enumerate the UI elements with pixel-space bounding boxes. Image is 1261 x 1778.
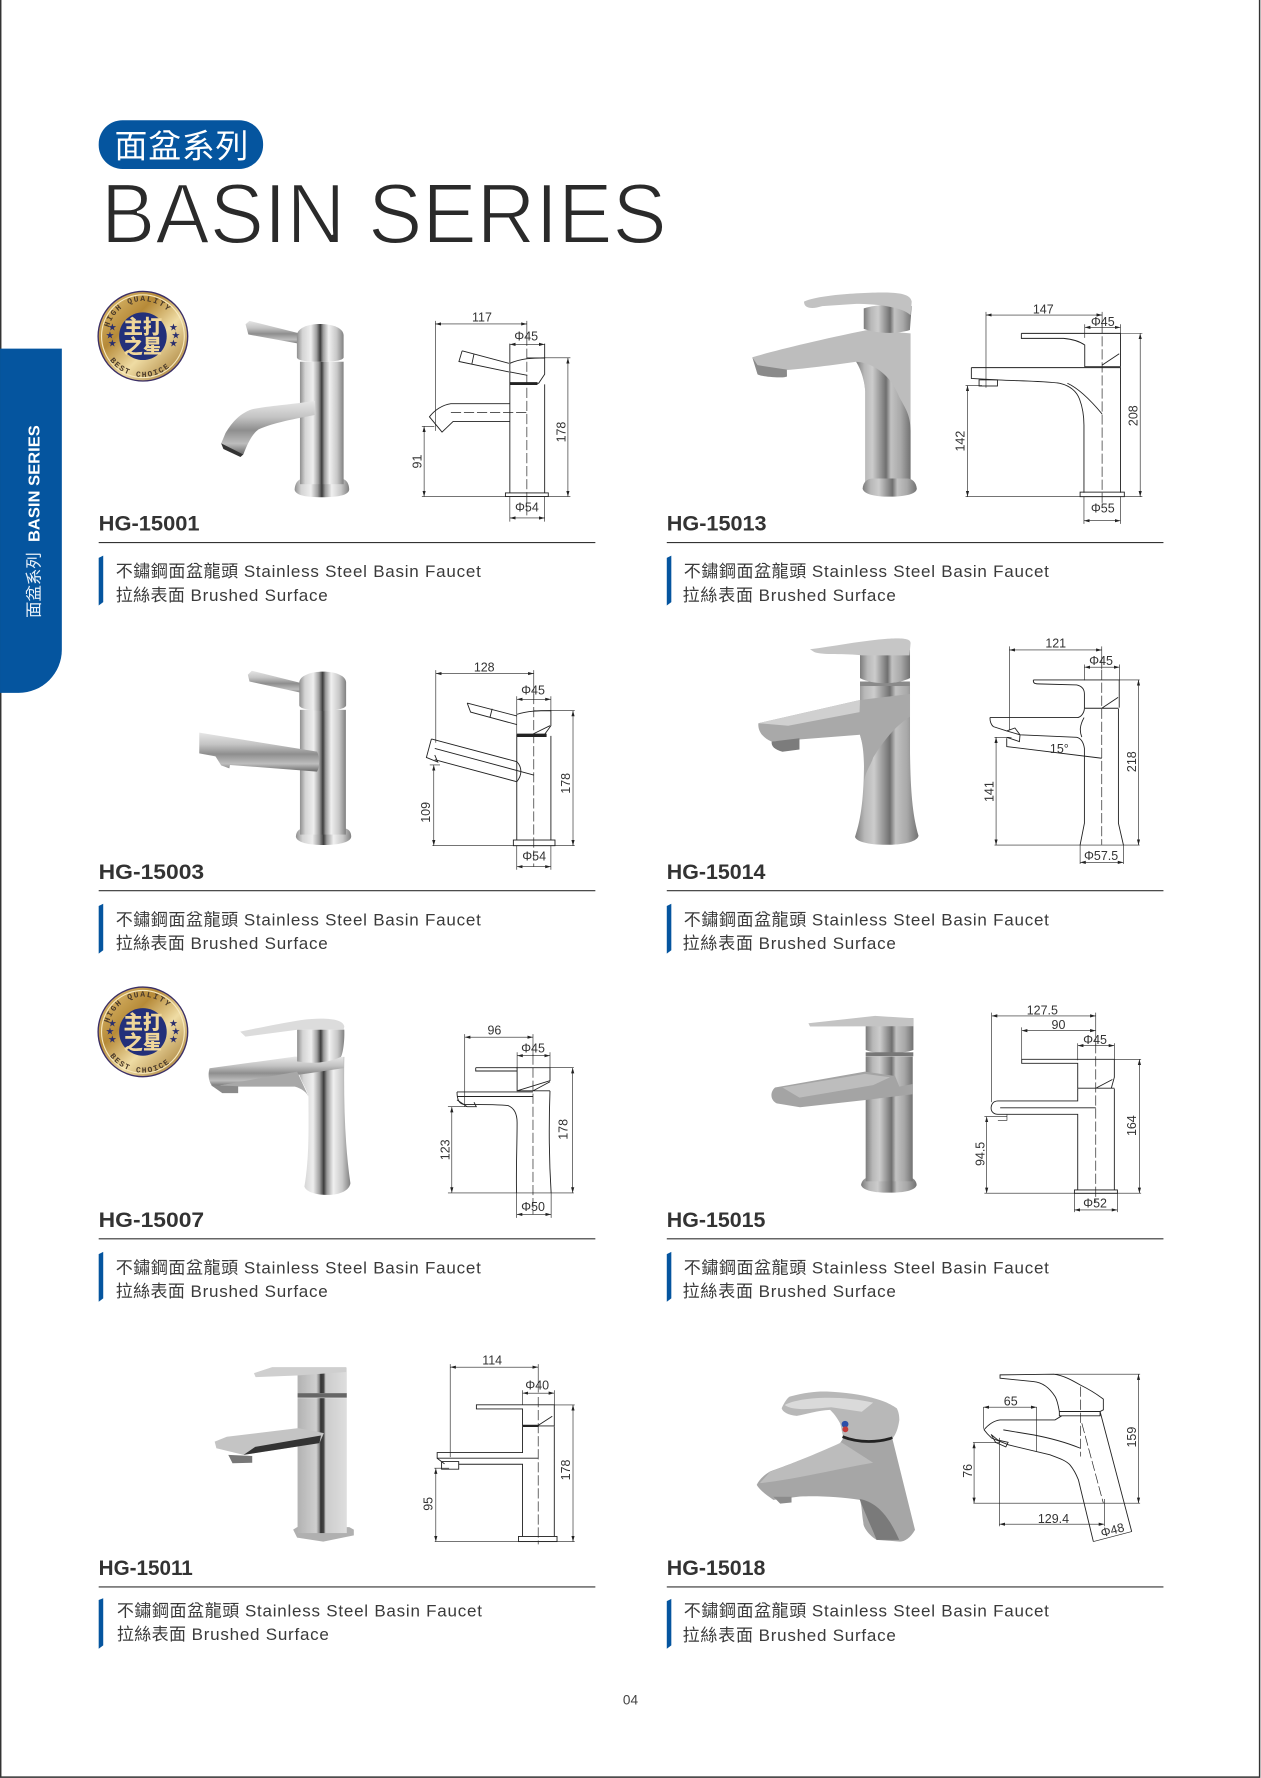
- description: 不鏽鋼面盆龍頭: [684, 1258, 806, 1277]
- technical drawing: 129.4: [1038, 1512, 1069, 1526]
- description: Brushed Surface: [759, 1626, 896, 1645]
- technical drawing: Φ57.5: [1084, 849, 1118, 863]
- technical drawing: 218: [1125, 751, 1139, 772]
- description: Brushed Surface: [759, 1282, 896, 1301]
- technical drawing: 123: [439, 1139, 453, 1160]
- description: 不鏽鋼面盆龍頭: [116, 562, 238, 581]
- technical drawing: Φ45: [1089, 654, 1113, 668]
- badge: best choice: 主打: [124, 315, 162, 338]
- technical drawing: 121: [1045, 636, 1066, 650]
- technical drawing: Φ54: [522, 850, 546, 864]
- technical drawing: [422, 1354, 575, 1544]
- panel: HG-15018: [667, 1374, 1163, 1649]
- badge: best choice: ★: [170, 339, 178, 348]
- technical drawing: Φ50: [521, 1200, 545, 1214]
- accent bar: [667, 1599, 671, 1649]
- description: 拉絲表面: [683, 586, 753, 605]
- technical drawing: 128: [474, 660, 495, 674]
- description: Brushed Surface: [192, 1625, 329, 1644]
- technical drawing: 178: [554, 422, 568, 442]
- description: [683, 910, 1049, 953]
- badge: best choice: ★: [170, 1035, 178, 1044]
- panel: HG-15013: [667, 293, 1163, 606]
- description: Stainless Steel Basin Faucet: [244, 1258, 481, 1277]
- rule: [667, 542, 1163, 544]
- technical drawing: 96: [487, 1024, 501, 1038]
- badge: best choice: 之星: [124, 1031, 162, 1054]
- technical drawing: 109: [419, 802, 433, 823]
- badge: best choice: ★: [106, 1027, 114, 1036]
- rule: [667, 890, 1163, 892]
- description: [116, 1258, 481, 1301]
- description: [116, 910, 481, 953]
- rule: [667, 1238, 1163, 1240]
- technical drawing: 127.5: [1027, 1003, 1058, 1017]
- description: Brushed Surface: [759, 586, 896, 605]
- description: Brushed Surface: [191, 586, 328, 605]
- description: Stainless Steel Basin Faucet: [812, 1601, 1049, 1620]
- badge: best choice: ★: [172, 1027, 180, 1036]
- technical drawing: 164: [1125, 1115, 1139, 1136]
- badge: best choice: ★: [172, 331, 180, 340]
- description: Brushed Surface: [191, 1282, 328, 1301]
- faucet photo: [752, 293, 917, 497]
- technical drawing: Φ52: [1083, 1197, 1107, 1211]
- badge: best choice: HIGH QUALITY: [104, 991, 171, 1023]
- description: 拉絲表面: [683, 1282, 753, 1301]
- badge: best choice: ★: [106, 331, 114, 340]
- model number: HG-15015: [667, 1208, 765, 1232]
- technical drawing: Φ45: [1091, 315, 1115, 329]
- technical drawing: 147: [1033, 302, 1054, 316]
- description: Stainless Steel Basin Faucet: [245, 1601, 482, 1620]
- technical drawing: 178: [557, 1119, 571, 1140]
- technical drawing: 91: [410, 455, 424, 468]
- technical drawing: [953, 302, 1142, 524]
- description: 拉絲表面: [116, 934, 185, 953]
- badge: best choice: ★: [108, 323, 116, 332]
- technical drawing: 94.5: [973, 1142, 987, 1166]
- badge: best choice: BEST CHOICE: [110, 357, 169, 378]
- badge: best choice: HIGH QUALITY: [104, 296, 171, 327]
- technical drawing: [973, 1003, 1141, 1212]
- panel: HG-15003: [99, 660, 595, 954]
- page number: 04: [623, 1692, 638, 1707]
- accent bar: [99, 556, 103, 606]
- technical drawing: 208: [1126, 405, 1140, 426]
- description: Brushed Surface: [191, 934, 328, 953]
- accent bar: [99, 904, 103, 954]
- technical drawing: 95: [422, 1497, 436, 1511]
- faucet photo: [757, 1392, 915, 1542]
- category pill heading: [99, 120, 263, 169]
- rule: [99, 1586, 595, 1588]
- technical drawing: 114: [482, 1354, 502, 1368]
- faucet photo: [209, 1019, 350, 1195]
- description: [116, 562, 481, 605]
- technical drawing: Φ45: [514, 330, 538, 344]
- model number: HG-15013: [667, 512, 767, 536]
- description: [117, 1601, 482, 1644]
- description: 拉絲表面: [683, 934, 753, 953]
- model number: HG-15007: [99, 1208, 204, 1232]
- technical drawing: 90: [1052, 1018, 1065, 1032]
- technical drawing: Φ45: [521, 684, 545, 698]
- description: 不鏽鋼面盆龍頭: [684, 1601, 806, 1620]
- panel: HG-15011: [99, 1354, 595, 1649]
- panel: HG-15014: [667, 636, 1163, 954]
- model number: HG-15003: [99, 860, 204, 884]
- technical drawing: Φ54: [515, 500, 539, 514]
- description: Stainless Steel Basin Faucet: [812, 910, 1049, 929]
- description: Stainless Steel Basin Faucet: [244, 910, 481, 929]
- description: 拉絲表面: [117, 1625, 186, 1644]
- accent bar: [99, 1252, 103, 1302]
- rule: [99, 890, 595, 892]
- technical drawing: Φ45: [521, 1041, 545, 1055]
- technical drawing: 159: [1125, 1427, 1139, 1448]
- technical drawing: Φ48: [1099, 1520, 1126, 1540]
- side tab: [0, 349, 62, 693]
- panel: HG-15007: [97, 986, 596, 1302]
- panel: HG-15015: [667, 1003, 1163, 1302]
- description: 不鏽鋼面盆龍頭: [116, 1258, 238, 1277]
- technical drawing: Φ45: [1083, 1033, 1107, 1047]
- faucet photo: [221, 321, 349, 497]
- technical drawing: [982, 636, 1140, 864]
- badge: best choice: ★: [170, 1019, 178, 1028]
- technical drawing: 178: [559, 1459, 573, 1480]
- description: 不鏽鋼面盆龍頭: [684, 910, 806, 929]
- technical drawing: 142: [953, 431, 967, 452]
- rule: [99, 1238, 595, 1240]
- description: 不鏽鋼面盆龍頭: [684, 562, 806, 581]
- description: [683, 562, 1049, 605]
- technical drawing: 117: [472, 310, 492, 324]
- rule: [667, 1586, 1163, 1588]
- technical drawing: 178: [559, 773, 573, 794]
- model number: HG-15018: [667, 1556, 765, 1580]
- faucet photo: [215, 1367, 354, 1542]
- side tab: 面盆系列: [26, 552, 44, 618]
- category pill heading: 面盆系列: [115, 128, 248, 165]
- accent bar: [99, 1598, 103, 1649]
- model number: HG-15014: [667, 860, 765, 884]
- description: 拉絲表面: [116, 586, 185, 605]
- panel: HG-15001: [97, 290, 596, 606]
- faucet photo: [199, 671, 351, 845]
- technical drawing: 76: [961, 1464, 975, 1478]
- side tab: BASIN SERIES: [27, 425, 44, 542]
- technical drawing: [961, 1374, 1140, 1542]
- description: Stainless Steel Basin Faucet: [244, 562, 481, 581]
- badge: best choice: ★: [108, 1035, 116, 1044]
- faucet photo: [758, 638, 919, 845]
- model number: HG-15011: [99, 1556, 193, 1580]
- badge: best choice: ★: [170, 323, 178, 332]
- title: BASIN SERIES: [101, 166, 667, 262]
- technical drawing: Φ55: [1091, 502, 1115, 516]
- faucet photo: [771, 1016, 917, 1193]
- description: Brushed Surface: [759, 934, 896, 953]
- technical drawing: [439, 1024, 574, 1218]
- accent bar: [667, 556, 671, 606]
- technical drawing: 15°: [1050, 742, 1069, 756]
- badge: best choice: [97, 986, 188, 1078]
- model number: HG-15001: [99, 512, 200, 536]
- technical drawing: [419, 660, 575, 870]
- technical drawing: Φ40: [525, 1379, 549, 1393]
- technical drawing: [410, 310, 570, 522]
- badge: best choice: ★: [108, 1019, 116, 1028]
- description: [683, 1258, 1049, 1301]
- badge: best choice: 主打: [124, 1011, 162, 1034]
- description: 拉絲表面: [683, 1626, 753, 1645]
- technical drawing: 141: [982, 781, 996, 802]
- description: 拉絲表面: [116, 1282, 185, 1301]
- badge: best choice: ★: [108, 339, 116, 348]
- description: Stainless Steel Basin Faucet: [812, 562, 1049, 581]
- description: [683, 1601, 1049, 1645]
- badge: best choice: BEST CHOICE: [110, 1052, 169, 1073]
- badge: best choice: 之星: [124, 335, 162, 358]
- technical drawing: 65: [1004, 1395, 1018, 1409]
- description: 不鏽鋼面盆龍頭: [116, 910, 238, 929]
- description: 不鏽鋼面盆龍頭: [117, 1601, 239, 1620]
- description: Stainless Steel Basin Faucet: [812, 1258, 1049, 1277]
- rule: [99, 542, 595, 544]
- accent bar: [667, 1252, 671, 1302]
- accent bar: [667, 904, 671, 954]
- badge: best choice: [97, 290, 188, 382]
